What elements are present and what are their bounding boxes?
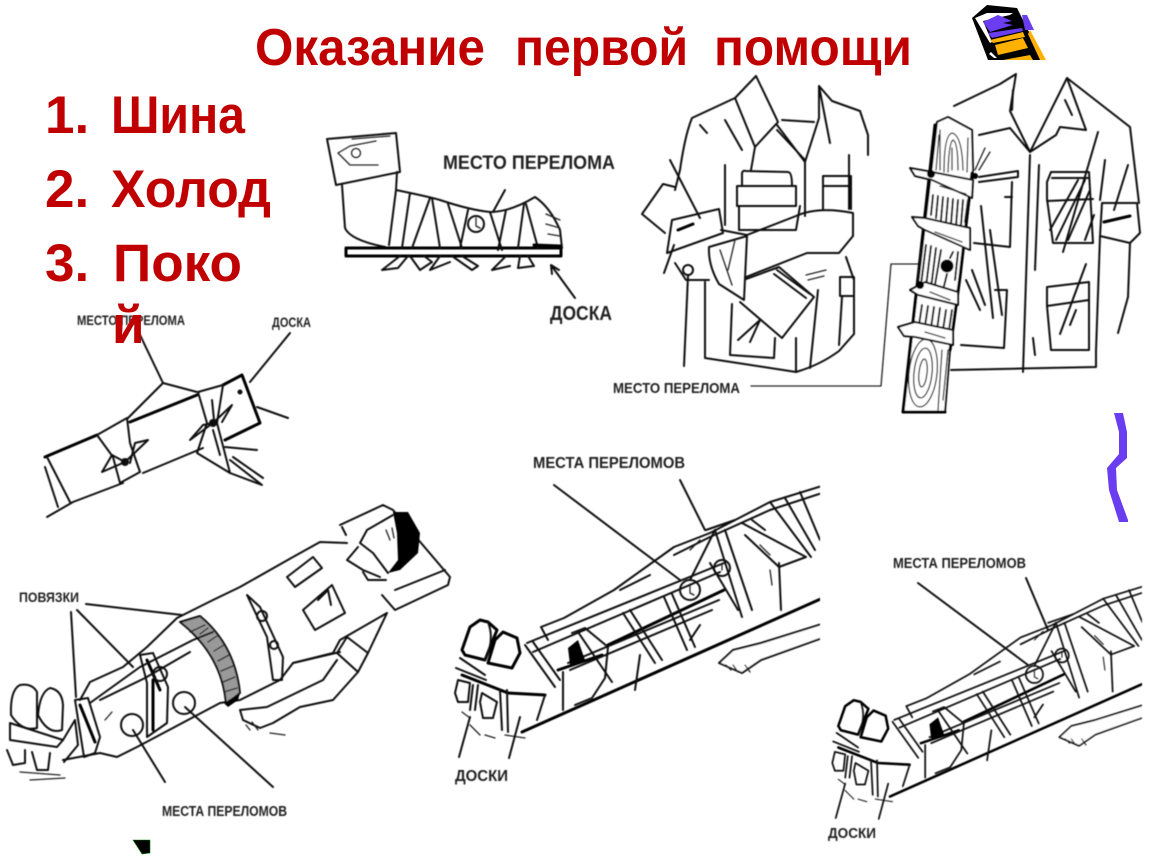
label: boards: ДОСКИ bbox=[828, 826, 876, 842]
label: fracture sites: МЕСТА ПЕРЕЛОМОВ bbox=[533, 455, 685, 472]
icon: clipped black mark bbox=[133, 840, 150, 854]
icon: hair bbox=[388, 512, 420, 573]
panel: leg splinted with boards, large bbox=[455, 455, 825, 785]
list: first aid steps: 1. bbox=[45, 86, 89, 145]
list: first aid steps: 2. bbox=[45, 160, 89, 219]
label: board: ДОСКА bbox=[550, 303, 612, 325]
list: first aid steps: Поко bbox=[113, 234, 242, 293]
list: first aid steps bbox=[45, 86, 271, 355]
list: first aid steps: й bbox=[112, 296, 145, 355]
label: fracture site: МЕСТО ПЕРЕЛОМА bbox=[77, 312, 185, 328]
panel: shirt with arm splinted to board bbox=[898, 74, 1140, 412]
label: fracture site: МЕСТО ПЕРЕЛОМА bbox=[443, 153, 615, 174]
label: fracture site: МЕСТО ПЕРЕЛОМА bbox=[613, 380, 740, 397]
label: fracture sites: МЕСТА ПЕРЕЛОМОВ bbox=[162, 804, 287, 820]
list: first aid steps: Холод bbox=[111, 160, 271, 219]
panel: person with bandaged leg bbox=[7, 505, 450, 820]
icon: wooden splint with ties bbox=[898, 117, 990, 412]
list: first aid steps: 3. bbox=[45, 234, 89, 293]
label: fracture sites: МЕСТА ПЕРЕЛОМОВ bbox=[893, 556, 1026, 572]
arrow: to board bbox=[551, 265, 575, 298]
label: board: ДОСКА bbox=[272, 314, 311, 330]
panel: arm with splint and ties bbox=[45, 312, 311, 517]
title: помощи bbox=[714, 19, 912, 77]
panel: leg splinted with boards, small bbox=[828, 556, 1150, 842]
icon: waist bandage bbox=[180, 616, 240, 704]
title: первой bbox=[515, 19, 688, 77]
label: bandages: ПОВЯЗКИ bbox=[19, 589, 79, 605]
icon: book bbox=[972, 5, 1046, 60]
label: boards: ДОСКИ bbox=[455, 768, 508, 785]
title: Оказание bbox=[255, 19, 485, 77]
icon: purple squiggle bbox=[1107, 413, 1128, 522]
title bbox=[255, 19, 912, 77]
list: first aid steps: Шина bbox=[111, 86, 245, 145]
panel: shirt with arm in sling bbox=[613, 76, 921, 397]
panel: bandaged forearm on board bbox=[327, 133, 615, 325]
